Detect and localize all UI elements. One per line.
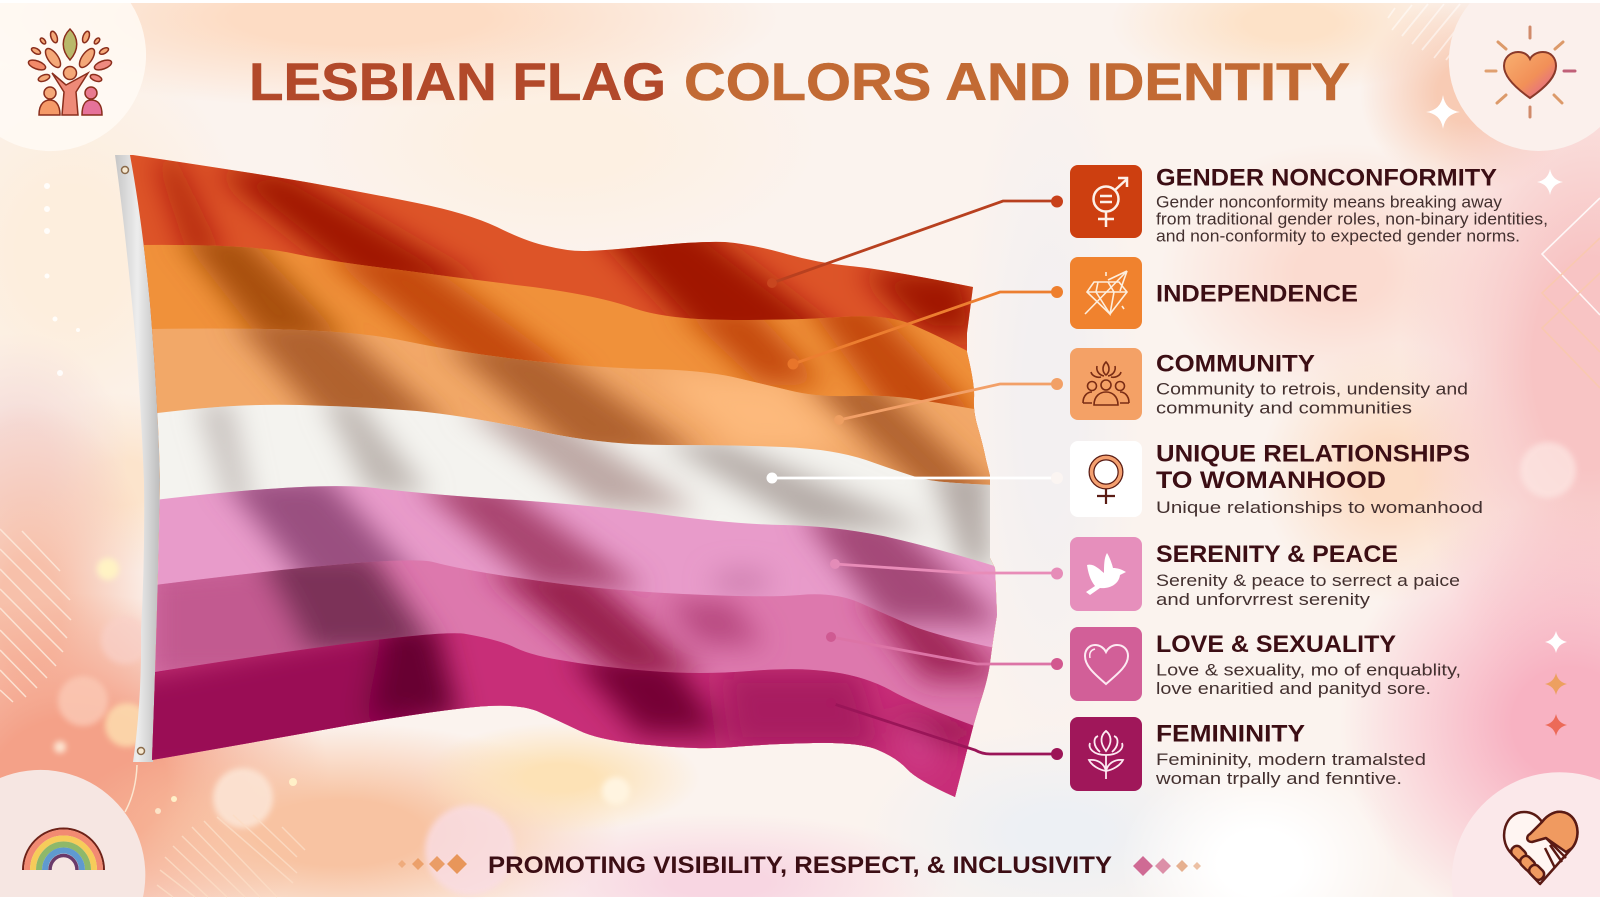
text block: love enaritied and panityd sore. — [1156, 680, 1431, 698]
flag — [100, 130, 1020, 812]
text block: Love & sexuality, mo of enquablity, — [1156, 662, 1461, 680]
text block: Unique relationships to womanhood — [1156, 499, 1483, 517]
text block: COMMUNITY — [1156, 350, 1315, 378]
icon: dove — [1070, 537, 1142, 611]
item: unique relationships — [1070, 440, 1483, 517]
text block: woman trpally and fenntive. — [1155, 770, 1402, 788]
flag stripes — [100, 130, 1020, 800]
corner circle: bottom right with handshake heart — [1452, 772, 1600, 897]
text block: from traditional gender roles, non-binary identities, — [1156, 210, 1548, 228]
icon: diamond with arrow — [1070, 257, 1142, 329]
text block: SERENITY & PEACE — [1156, 541, 1398, 568]
footer banner — [398, 852, 1201, 879]
icon: heart — [1070, 627, 1142, 701]
sparkles — [1426, 95, 1567, 736]
connector: love — [826, 632, 1063, 670]
text block: TO WOMANHOOD — [1156, 467, 1386, 494]
text block — [1156, 541, 1460, 609]
bokeh lights — [44, 183, 1576, 895]
stripe: dark rose — [152, 633, 974, 797]
item: serenity and peace — [1070, 537, 1460, 611]
title — [249, 53, 1350, 112]
text block: Gender nonconformity means breaking away — [1156, 194, 1503, 212]
icon: rainbow — [23, 829, 104, 870]
diamond outline decoration — [1542, 198, 1600, 388]
connector: womanhood — [766, 472, 1063, 484]
icon: female symbol — [1070, 441, 1142, 517]
item: femininity — [1070, 717, 1426, 791]
icon: tree of people — [27, 29, 113, 115]
stripe: white — [152, 404, 997, 797]
corner circle: bottom left with rainbow — [0, 770, 145, 897]
stripe: light pink — [155, 486, 997, 725]
text block — [1156, 440, 1483, 517]
left diamonds — [398, 854, 467, 874]
right diamonds — [1133, 856, 1201, 876]
text block — [1156, 631, 1461, 698]
stripe: orange — [144, 244, 997, 797]
text block: INDEPENDENCE — [1156, 280, 1358, 308]
title: LESBIAN FLAG — [249, 53, 666, 112]
text block: Community to retrois, undensity and — [1156, 380, 1468, 398]
item: independence — [1070, 257, 1358, 329]
connector: serenity — [830, 559, 1063, 580]
text block: LOVE & SEXUALITY — [1156, 631, 1396, 658]
text block — [1156, 350, 1468, 418]
text block: Femininity, modern tramalsted — [1156, 751, 1426, 769]
connector: community — [834, 378, 1063, 425]
stripe: peach — [152, 328, 997, 644]
stripe: dark orange — [100, 130, 1020, 800]
connector: gender nonconformity — [767, 196, 1063, 288]
text block: and unforvrrest serenity — [1156, 591, 1371, 609]
flag pole sleeve — [115, 155, 160, 812]
text block: and non-conformity to expected gender norms. — [1156, 228, 1520, 246]
icon: flower — [1070, 717, 1142, 791]
text block: Serenity & peace to serrect a paice — [1156, 572, 1460, 590]
text block: FEMININITY — [1156, 720, 1305, 748]
connector: independence — [788, 286, 1063, 370]
icon: people group — [1070, 348, 1142, 420]
footer text: PROMOTING VISIBILITY, RESPECT, & INCLUSIVITY — [488, 852, 1112, 879]
title: COLORS AND IDENTITY — [684, 53, 1350, 112]
text block — [1156, 164, 1548, 246]
connector: femininity — [826, 698, 1063, 760]
item: community — [1070, 348, 1468, 420]
icon: heart with rays — [1486, 27, 1575, 117]
text block: community and communities — [1156, 400, 1412, 418]
connector lines — [766, 196, 1063, 760]
item: love and sexuality — [1070, 627, 1461, 701]
icon: handshake heart — [1504, 812, 1577, 884]
text block: GENDER NONCONFORMITY — [1156, 164, 1497, 192]
icon: gender symbol — [1070, 165, 1142, 238]
stripe: medium pink — [152, 560, 992, 797]
text block: UNIQUE RELATIONSHIPS — [1156, 440, 1470, 468]
corner circle: top right with glowing heart — [1449, 3, 1600, 151]
text block — [1155, 720, 1426, 788]
corner circle: top left with tree icon — [0, 3, 146, 151]
item: gender nonconformity — [1070, 164, 1548, 246]
